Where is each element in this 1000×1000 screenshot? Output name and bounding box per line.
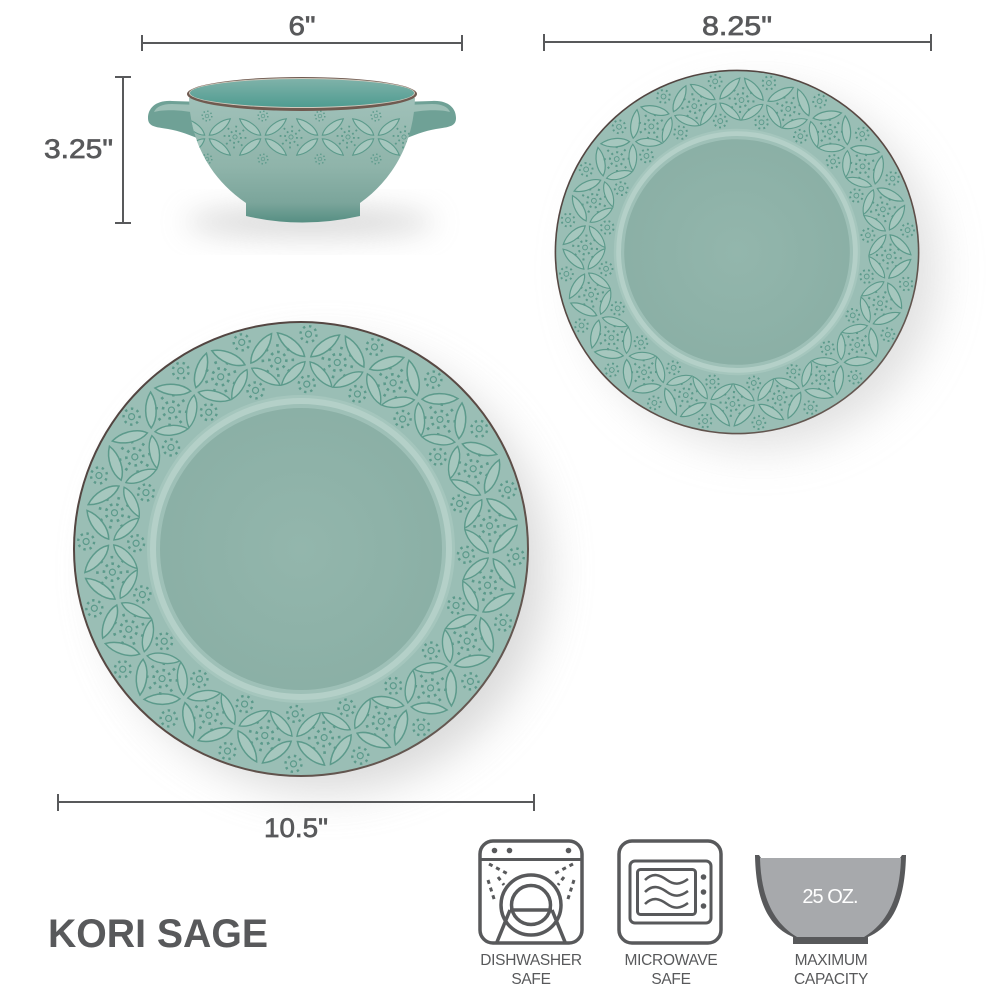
dimension: small plate width (544, 11, 931, 51)
icon: microwave safe (619, 841, 721, 988)
small plate photo (443, 0, 1000, 541)
small plate shadow (582, 92, 938, 448)
dimension: large plate width: 10.5" (264, 813, 328, 843)
large plate (0, 257, 592, 870)
icon: dishwasher safe: SAFE (511, 971, 551, 988)
large plate shadow (103, 348, 547, 792)
dimension: large plate width (58, 794, 534, 843)
icon: maximum capacity bowl (755, 855, 906, 988)
icon: maximum capacity bowl: MAXIMUM (795, 952, 867, 969)
dimension: small plate width: 8.25" (702, 11, 772, 41)
icon: maximum capacity bowl: CAPACITY (794, 971, 868, 988)
embossed band (192, 110, 410, 164)
dimension: bowl width: 6" (288, 11, 316, 41)
right handle (400, 101, 456, 141)
dimension: bowl height: 3.25" (44, 134, 113, 164)
icon: maximum capacity bowl: 25 OZ. (802, 886, 858, 908)
large plate photo (0, 257, 592, 870)
bowl body (189, 98, 415, 222)
icon: dishwasher safe: DISHWASHER (480, 952, 582, 969)
title: product name: KORI SAGE (48, 912, 268, 956)
bowl shadow (185, 207, 435, 237)
dimension: bowl height (44, 77, 131, 223)
icon: microwave safe: SAFE (651, 971, 691, 988)
bowl rim and interior (187, 77, 417, 111)
icon: microwave safe: MICROWAVE (625, 952, 717, 969)
dimension: bowl width (142, 11, 462, 51)
left handle (148, 101, 204, 141)
icon: dishwasher safe (480, 841, 582, 988)
soup bowl photo (124, 77, 456, 237)
small plate (443, 0, 1000, 541)
